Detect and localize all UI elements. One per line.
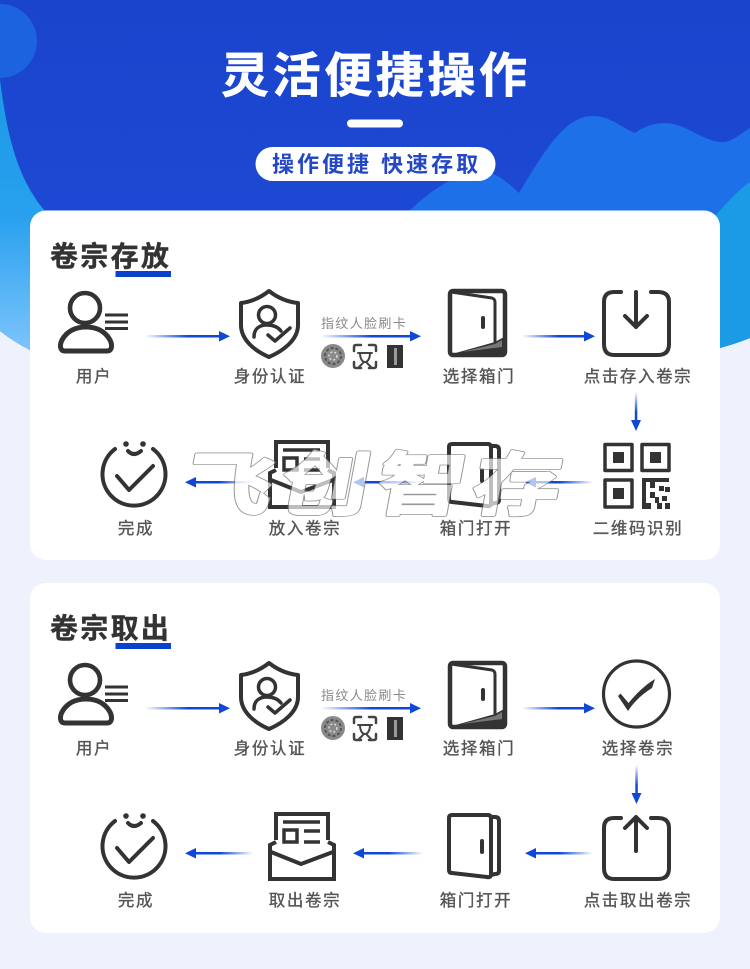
arrow: identity to door <box>320 331 421 342</box>
label: retrieve: 点击取出卷宗 <box>584 891 692 910</box>
heading: storage: 卷宗存放 <box>50 240 171 272</box>
icon: auth methods <box>321 716 403 740</box>
icon: user <box>60 665 128 723</box>
arrow: door to deposit <box>522 331 595 342</box>
title: 灵活便捷操作 <box>221 50 531 103</box>
arrow: door open to take file <box>353 848 423 858</box>
icon: door <box>450 663 505 727</box>
arrow: retrieve to door open <box>525 848 593 858</box>
label: choose door: 选择箱门 <box>443 739 515 758</box>
icon: auth methods <box>321 344 403 368</box>
icon: deposit <box>604 292 669 355</box>
icon: envelope file <box>270 814 334 879</box>
arrow: place file to done <box>185 477 253 488</box>
auth methods caption: 指纹人脸刷卡 <box>321 688 407 703</box>
arrow: user to identity <box>145 331 230 342</box>
label: done: 完成 <box>118 519 154 538</box>
icon: open door <box>449 815 499 877</box>
label: select file: 选择卷宗 <box>602 739 674 758</box>
header background <box>0 0 750 350</box>
panel: storage <box>30 210 720 560</box>
arrow: user to identity <box>145 703 230 714</box>
panel: retrieval <box>30 583 720 933</box>
label: take file: 取出卷宗 <box>269 891 341 910</box>
watermark: 飞创智存 <box>179 447 577 524</box>
arrow: door to select <box>522 703 595 714</box>
icon: user <box>60 293 128 351</box>
label: identity: 身份认证 <box>234 739 306 758</box>
label: done: 完成 <box>118 891 154 910</box>
subtitle pill: 操作便捷 快速存取 <box>272 152 481 177</box>
icon: QR code <box>605 444 670 509</box>
label: QR recognition: 二维码识别 <box>593 519 683 538</box>
label: door opens: 箱门打开 <box>440 891 512 910</box>
heading: retrieval: 卷宗取出 <box>50 612 171 644</box>
arrow: take file to done <box>185 848 253 858</box>
arrow: identity to door <box>320 703 421 714</box>
label: choose door: 选择箱门 <box>443 367 515 386</box>
arrow: select to retrieve <box>632 765 642 804</box>
icon: shield <box>241 291 298 357</box>
icon: envelope file <box>270 442 334 507</box>
icon: done <box>102 441 166 506</box>
label: identity: 身份认证 <box>234 367 306 386</box>
icon: shield <box>241 663 298 729</box>
subtitle pill <box>256 147 496 181</box>
icon: open door <box>449 444 499 506</box>
auth methods caption: 指纹人脸刷卡 <box>321 316 407 331</box>
title divider bar <box>347 120 403 128</box>
label: place file: 放入卷宗 <box>269 519 341 538</box>
arrow: door open to place file <box>353 477 423 488</box>
label: user: 用户 <box>76 739 112 758</box>
label: door opens: 箱门打开 <box>440 519 512 538</box>
icon: retrieve <box>604 817 669 879</box>
arrow: QR to door open <box>525 477 593 488</box>
icon: done <box>102 813 166 878</box>
icon: door <box>450 291 505 355</box>
label: deposit: 点击存入卷宗 <box>584 367 692 386</box>
watermark: 飞创智存 <box>179 447 577 524</box>
label: user: 用户 <box>76 367 112 386</box>
arrow: deposit to QR <box>631 392 641 431</box>
icon: check circle <box>604 661 670 727</box>
